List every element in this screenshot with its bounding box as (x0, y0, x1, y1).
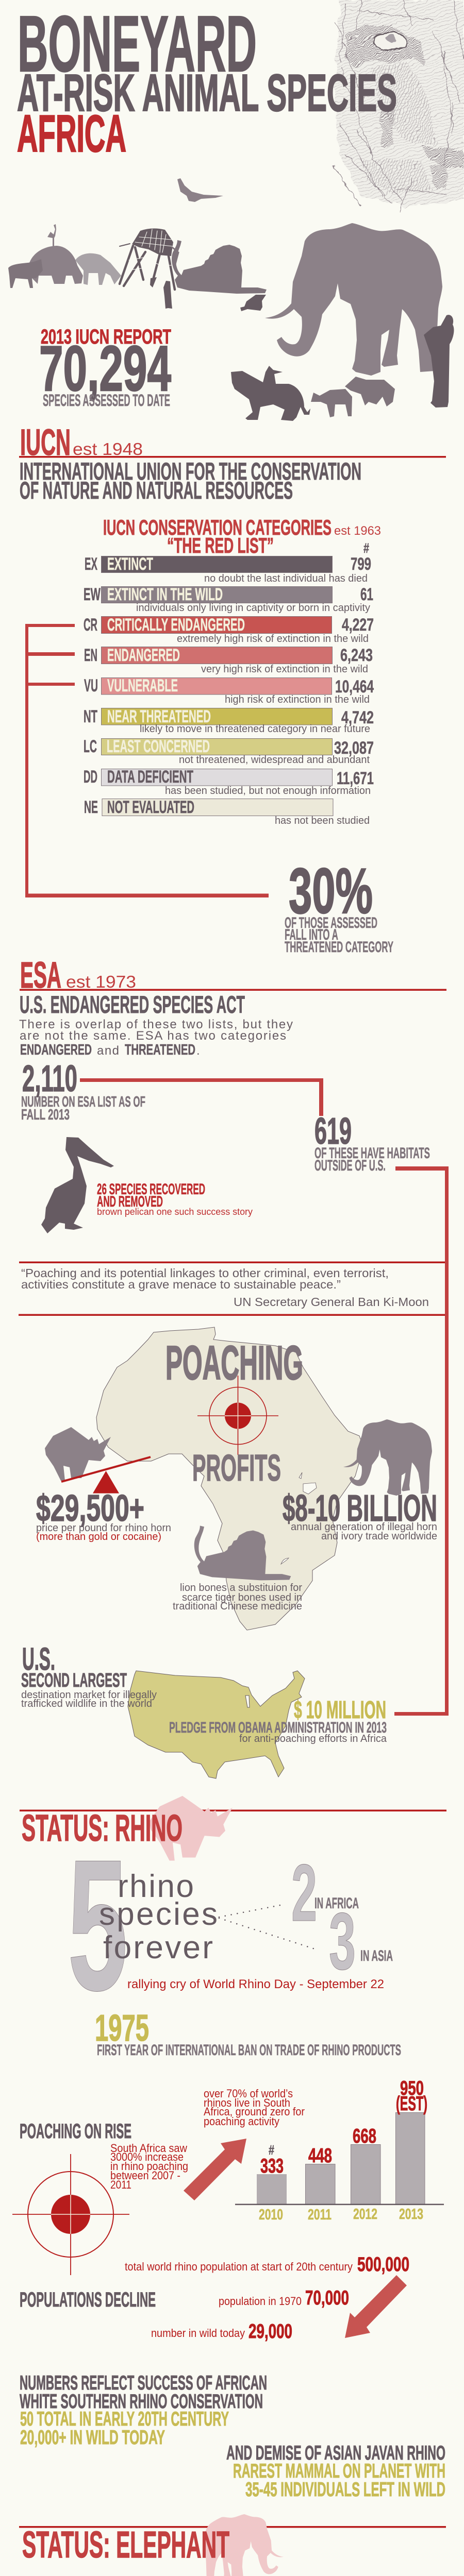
dotted connectors (219, 1905, 318, 1950)
row: extinct in the wild: individuals only living in captivity or born in captivity (136, 602, 370, 614)
row: endangered (84, 646, 373, 675)
row: near threatened: 4,742 (341, 708, 374, 727)
stat: rhino horn price: price per pound for rhino horn (36, 1522, 171, 1534)
milestone: 1975 ban (95, 2008, 401, 2059)
row: not evaluated: NOT EVALUATED (107, 798, 194, 817)
bar chart: rhinos poached: 2012 (353, 2206, 377, 2223)
row: critically endangered: CRITICALLY ENDANGERED (107, 615, 245, 635)
stat: pledge: $ 10 MILLION (294, 1697, 386, 1724)
row: data deficient: 11,671 (337, 769, 374, 788)
stat: 500,000 (125, 2253, 409, 2276)
icon: lion lying (172, 240, 267, 294)
row: extinct: no doubt the last individual has died (204, 573, 368, 584)
stat: rhino horn price: $29,500+ (36, 1488, 144, 1529)
callout: species recovered (97, 1181, 253, 1217)
stat: 2,110 listed: NUMBER ON ESA LIST AS OF (21, 1094, 145, 1110)
heading: POPULATIONS DECLINE (20, 2289, 156, 2311)
map: Africa (96, 1327, 363, 1630)
icon: capybara (345, 377, 395, 406)
row: endangered: 6,243 (340, 646, 373, 665)
bar chart: rhinos poached: (EST) (396, 2093, 427, 2115)
stat: 2,110 listed: 2,110 (22, 1058, 77, 1099)
text block: ESA explanation (19, 1018, 293, 1058)
callout: species recovered: 26 SPECIES RECOVERED (97, 1181, 205, 1198)
row: vulnerable: 10,464 (335, 677, 374, 697)
stat: 29,000 (151, 2320, 292, 2343)
row: vulnerable: VULNERABLE (107, 676, 178, 696)
stat: 70,000: 70,000 (305, 2287, 349, 2309)
illustration: lion face sketch (333, 0, 464, 211)
stat: 70,000 (219, 2287, 349, 2309)
row: extinct: EX (85, 554, 97, 574)
big number: 70,294 (39, 333, 171, 404)
icon: small primate (240, 295, 266, 311)
quote: Ban Ki-Moon (19, 1261, 445, 1316)
row: near threatened: likely to move in threatened category in near future (140, 723, 370, 735)
icon: pelican (41, 1137, 114, 1233)
row: extinct in the wild: EW (84, 585, 101, 604)
callout: species recovered: AND REMOVED (97, 1193, 163, 1210)
stat: 30 percent threatened: OF THOSE ASSESSED (285, 914, 377, 931)
text block: 70 percent: Africa, ground zero for (204, 2105, 305, 2118)
stat: 500,000: 500,000 (357, 2253, 409, 2276)
bar chart: rhinos poached: # (269, 2142, 274, 2158)
text block: 70 percent: over 70% of world’s (204, 2087, 293, 2100)
icon: target crosshair (197, 1376, 278, 1455)
stat: illegal trade value: and ivory trade worldwide (321, 1531, 437, 1542)
text block: ESA explanation: THREATENED (125, 1042, 195, 1058)
slogan: forever (103, 1930, 213, 1965)
text block: South Africa increase: 2011 (110, 2178, 131, 2191)
stat: rhino horn price: (more than gold or cocaine) (36, 1531, 161, 1543)
established date: est 1963 (334, 524, 381, 538)
established date: est 1948 (73, 439, 143, 459)
stat: 29,000: 29,000 (248, 2320, 292, 2343)
panel: U.S. market (21, 1641, 387, 1778)
arrow: long connector to pledge (394, 1166, 449, 1716)
panel: ESA heading: est 1973 (66, 972, 136, 991)
icon: person (424, 315, 454, 408)
stat: rhino horn price (36, 1488, 171, 1543)
stat: pledge (169, 1697, 387, 1744)
caption: rallying cry of World Rhino Day - September 22 (127, 1977, 384, 1991)
stat: 3 in Asia: IN ASIA (360, 1947, 393, 1964)
text block: conservation success: NUMBERS REFLECT SUCCESS OF AFRICAN (20, 2372, 267, 2394)
row: endangered: ENDANGERED (107, 646, 180, 665)
bar chart: rhinos poached (235, 2077, 444, 2223)
text block: South Africa increase: between 2007 - (110, 2169, 180, 2182)
text block: South Africa increase: in rhino poaching (110, 2160, 188, 2173)
heading: poaching: POACHING (165, 1336, 303, 1389)
panel: ESA heading (20, 955, 446, 1018)
heading: U.S.: U.S. (22, 1641, 55, 1676)
text block: conservation success: WHITE SOUTHERN RHINO CONSERVATION (20, 2391, 263, 2413)
row: least concerned (84, 737, 374, 766)
stat: 619 habitats outside U.S.: OUTSIDE OF U.S. (314, 1157, 386, 1174)
text block: conservation success: 50 TOTAL IN EARLY 20TH CENTURY (20, 2408, 229, 2430)
row: critically endangered: CR (84, 615, 97, 635)
row: extinct in the wild: EXTINCT IN THE WILD (107, 585, 223, 604)
stat: illegal trade value: annual generation of illegal horn (291, 1521, 437, 1533)
row: extinct in the wild (84, 585, 373, 614)
row: vulnerable: VU (84, 676, 98, 696)
text block: ESA explanation: There is overlap of these two lists, but they (19, 1018, 293, 1031)
callout: species recovered: brown pelican one such success story (97, 1207, 253, 1217)
heading: second largest: SECOND LARGEST (21, 1670, 127, 1691)
stat: 30 percent threatened (285, 856, 393, 956)
row: data deficient: DATA DEFICIENT (107, 767, 193, 787)
stat: 30 percent threatened: FALL INTO A (285, 926, 338, 943)
text block: ESA explanation: and (97, 1044, 119, 1058)
heading: POACHING ON RISE (20, 2120, 131, 2143)
milestone: 1975 ban: 1975 (95, 2008, 149, 2049)
stat: 2 in Africa (291, 1848, 359, 1938)
row: not evaluated: has not been studied (275, 815, 370, 826)
row: near threatened (84, 707, 374, 735)
row: data deficient: has been studied, but not enough information (165, 785, 371, 796)
map: United States (128, 1671, 305, 1778)
stat: species assessed (39, 326, 171, 410)
row: least concerned: LEAST CONCERNED (107, 737, 210, 756)
row: near threatened: NEAR THREATENED (107, 707, 211, 726)
subtitle: Africa: AFRICA (17, 105, 126, 163)
row: least concerned: not threatened, widespread and abundant (179, 754, 370, 766)
text block: 70 percent (204, 2087, 305, 2128)
icon: meerkat (163, 281, 172, 309)
bar chart: rhinos poached: 2013 (399, 2206, 423, 2223)
panel: populations decline (20, 2253, 409, 2343)
icon: target crosshair (12, 2154, 129, 2275)
stat: 2,110 listed: FALL 2013 (21, 1107, 70, 1123)
icon: small goat (311, 389, 352, 417)
text block: South Africa increase (110, 2142, 188, 2191)
text block: lion bones: scarce tiger bones used in (182, 1592, 302, 1603)
row: critically endangered: 4,227 (342, 615, 374, 635)
heading: 2013 IUCN REPORT (41, 326, 171, 348)
panel: status rhino (20, 1796, 446, 2029)
row: data deficient (84, 767, 374, 796)
panel: status elephant (18, 2514, 446, 2576)
row: least concerned: LC (84, 737, 97, 756)
text block: trafficked wildlife in the world (21, 1698, 152, 1709)
panel: ESA heading: ESA (20, 955, 61, 996)
stat: 2 in Africa: 2 (291, 1848, 317, 1938)
row: extinct: EXTINCT (107, 554, 153, 574)
stat: 3 in Asia: 3 (329, 1896, 356, 1987)
text block: conservation success: 20,000+ IN WILD TODAY (20, 2427, 165, 2449)
icon: flamingo (47, 224, 56, 247)
row: least concerned: 32,087 (334, 738, 374, 758)
heading: STATUS: RHINO (22, 1808, 183, 1849)
text block: lion bones: lion bones a substituion for (180, 1582, 302, 1594)
row: extinct: 799 (351, 554, 371, 574)
stat: pledge: for anti-poaching efforts in Africa (239, 1733, 387, 1744)
column header: # (363, 540, 369, 556)
row: not evaluated: NE (84, 798, 98, 817)
quote: Ban Ki-Moon: “Poaching and its potential linkages to other criminal, even terrorist, (21, 1266, 389, 1280)
stat: 70,000: population in 1970 (219, 2295, 302, 2308)
stat: 2 in Africa: IN AFRICA (314, 1895, 359, 1912)
slogan: rhino (118, 1869, 194, 1904)
bar chart: rhinos poached: 2010 (259, 2207, 283, 2223)
panel: poaching on rise (12, 2077, 444, 2275)
text block: 70 percent: poaching activity (204, 2115, 279, 2128)
slogan (99, 1869, 218, 1965)
row: not evaluated (84, 798, 370, 826)
row: data deficient: DD (84, 767, 97, 787)
icon: antelope (75, 253, 121, 285)
icon: warthog (8, 259, 43, 288)
panel: red list categories (84, 515, 381, 826)
icon: hippo (29, 246, 83, 284)
stat: illegal trade value (283, 1488, 437, 1542)
row: extinct (85, 554, 371, 584)
row: endangered: EN (84, 646, 97, 665)
panel: ESA heading: U.S. ENDANGERED SPECIES ACT (20, 991, 245, 1018)
icon: elephant (343, 1419, 432, 1496)
bar chart: rhinos poached: 448 (308, 2145, 332, 2167)
icon: balance scale (61, 1457, 151, 1493)
row: vulnerable: high risk of extinction in the wild (225, 694, 370, 705)
text block: ESA explanation: ENDANGERED (20, 1042, 92, 1058)
caption: SPECIES ASSESSED TO DATE (43, 391, 170, 410)
bar chart: rhinos poached: 950 (400, 2077, 424, 2099)
bar chart: rhinos poached: 668 (353, 2125, 376, 2147)
icon: giraffe (120, 228, 178, 290)
panel: poaching profits map (36, 1327, 437, 1630)
text block: Javan rhino (226, 2442, 445, 2501)
bar chart: rhinos poached: 2011 (308, 2207, 332, 2223)
bracket: threatened categories connector (25, 624, 269, 897)
arrow: declining (345, 2275, 407, 2338)
text block: South Africa increase: 3000% increase (110, 2150, 184, 2163)
text block: lion bones: traditional Chinese medicine (173, 1601, 302, 1612)
quote: Ban Ki-Moon: UN Secretary General Ban Ki-Moon (234, 1295, 429, 1309)
heading: profits: PROFITS (192, 1448, 281, 1489)
icon: pink elephant (204, 2514, 284, 2576)
text block: conservation success (20, 2372, 267, 2449)
icon: rhino on scale (45, 1427, 111, 1481)
quote: Ban Ki-Moon: activities constitute a grave menace to sustainable peace.” (21, 1278, 341, 1291)
bar chart: rhinos poached: 333 (260, 2155, 284, 2177)
illustration: animal herd (8, 223, 454, 421)
arrow: connector 2,110 to 619 (80, 1078, 323, 1116)
title block (17, 0, 397, 163)
stat: 619 habitats outside U.S. (314, 1111, 430, 1174)
text block: ESA explanation: are not the same. ESA has two categories (20, 1029, 286, 1043)
icon: lioness with primate (231, 366, 310, 421)
text block: destination market for illegally (21, 1689, 157, 1701)
icon: lion (194, 1526, 291, 1580)
text block: 70 percent: rhinos live in South (204, 2096, 290, 2109)
stat: 30 percent threatened: 30% (289, 856, 373, 927)
icon: flying bird (177, 178, 223, 202)
stat: 2,110 listed (21, 1058, 145, 1123)
big number 5: 5 (68, 1820, 128, 2029)
text block: South Africa increase: South Africa saw (110, 2142, 187, 2155)
stat: 29,000: number in wild today (151, 2327, 245, 2340)
slogan: species (99, 1896, 218, 1932)
icon: pink rhino (150, 1796, 233, 1861)
row: vulnerable (84, 676, 374, 705)
panel: IUCN heading (19, 422, 446, 504)
text block (21, 1689, 157, 1709)
heading line two: “THE RED LIST” (167, 533, 274, 557)
row: near threatened: NT (84, 707, 97, 726)
title: Boneyard: BONEYARD (18, 0, 257, 88)
stat: 500,000: total world rhino population at start of 20th century (125, 2260, 353, 2273)
row: extinct in the wild: 61 (360, 585, 373, 604)
row: endangered: very high risk of extinction in the wild (201, 664, 368, 675)
text block: lion bones (173, 1582, 302, 1612)
row: critically endangered (84, 615, 374, 645)
arrow: rising (184, 2139, 246, 2200)
icon: elephant (265, 223, 442, 376)
stat: 619 habitats outside U.S.: 619 (314, 1111, 352, 1152)
row: critically endangered: extremely high risk of extinction in the wild (177, 633, 369, 645)
heading: IUCN (20, 422, 71, 463)
text block: ESA explanation: . (196, 1044, 200, 1058)
heading: STATUS: ELEPHANT (22, 2524, 229, 2566)
